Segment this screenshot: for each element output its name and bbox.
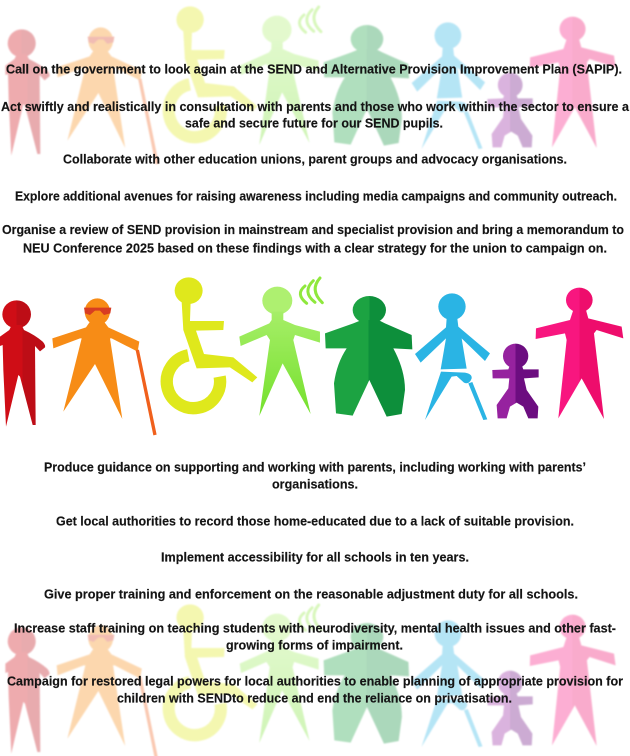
demand: act swiftly: safe and secure future for our SEND pupils.	[185, 116, 443, 130]
demand: act swiftly: Act swiftly and realistically in consultation with parents and those who work within the sector to ensure a	[1, 100, 630, 114]
figure: dark green person	[325, 296, 412, 417]
text block: upper list of demands	[1, 62, 630, 256]
demand: review of provision: NEU Conference 2025 based on these findings with a clear strategy for the union to campaign on.	[23, 242, 607, 256]
figure: pink person	[536, 288, 623, 419]
demand: raise awareness: Explore additional avenues for raising awareness including media campaigns and community outreach.	[15, 190, 617, 204]
demand: staff training: growing forms of impairment.	[226, 638, 403, 652]
faded figures: bottom background row	[5, 604, 616, 756]
figure: light green person with sound waves	[239, 278, 322, 416]
faded figures: top background row	[5, 6, 616, 164]
icon: sound waves	[300, 278, 322, 303]
figure: red person	[0, 300, 45, 427]
demand: staff training	[14, 622, 616, 652]
demand: guidance for parents: Produce guidance on supporting and working with parents, including working with parents’	[44, 460, 586, 474]
text block: lower list of demands	[7, 460, 623, 706]
demand: collaborate: Collaborate with other education unions, parent groups and advocacy organisations.	[63, 152, 567, 166]
figure: orange person with dark glasses and cane	[52, 298, 155, 435]
demand: record home-educated: Get local authorities to record those home-educated due to a lack of suitable provision.	[56, 514, 574, 528]
demand: restored legal powers	[7, 674, 623, 706]
demand: accessibility: Implement accessibility for all schools in ten years.	[161, 550, 469, 564]
figure: blue person with prosthetic leg	[415, 293, 490, 420]
demand: SAPIP: Call on the government to look again at the SEND and Alternative Provision Improvement Plan (SAPIP).	[6, 62, 622, 76]
demand: reasonable adjustment: Give proper training and enforcement on the reasonable adjustment duty for all schools.	[44, 588, 578, 602]
demand: review of provision: Organise a review of SEND provision in mainstream and specialist provision and bring a memorandum to	[2, 223, 624, 237]
demand: guidance for parents: organisations.	[272, 478, 358, 492]
demand: staff training: Increase staff training on teaching students with neurodiversity, mental health issues and other fast-	[14, 622, 616, 636]
demand: restored legal powers: Campaign for restored legal powers for local authorities to enable planning of appropriate provision for	[7, 674, 623, 688]
row of coloured paper figures	[0, 277, 623, 435]
demand: act swiftly	[1, 100, 630, 130]
figure: yellow wheelchair user	[167, 277, 257, 408]
demand: restored legal powers: children with SENDto reduce and end the reliance on privatisation.	[117, 692, 512, 706]
demand: review of provision	[2, 223, 624, 256]
figure: purple child	[492, 344, 539, 418]
demand: guidance for parents	[44, 460, 586, 492]
